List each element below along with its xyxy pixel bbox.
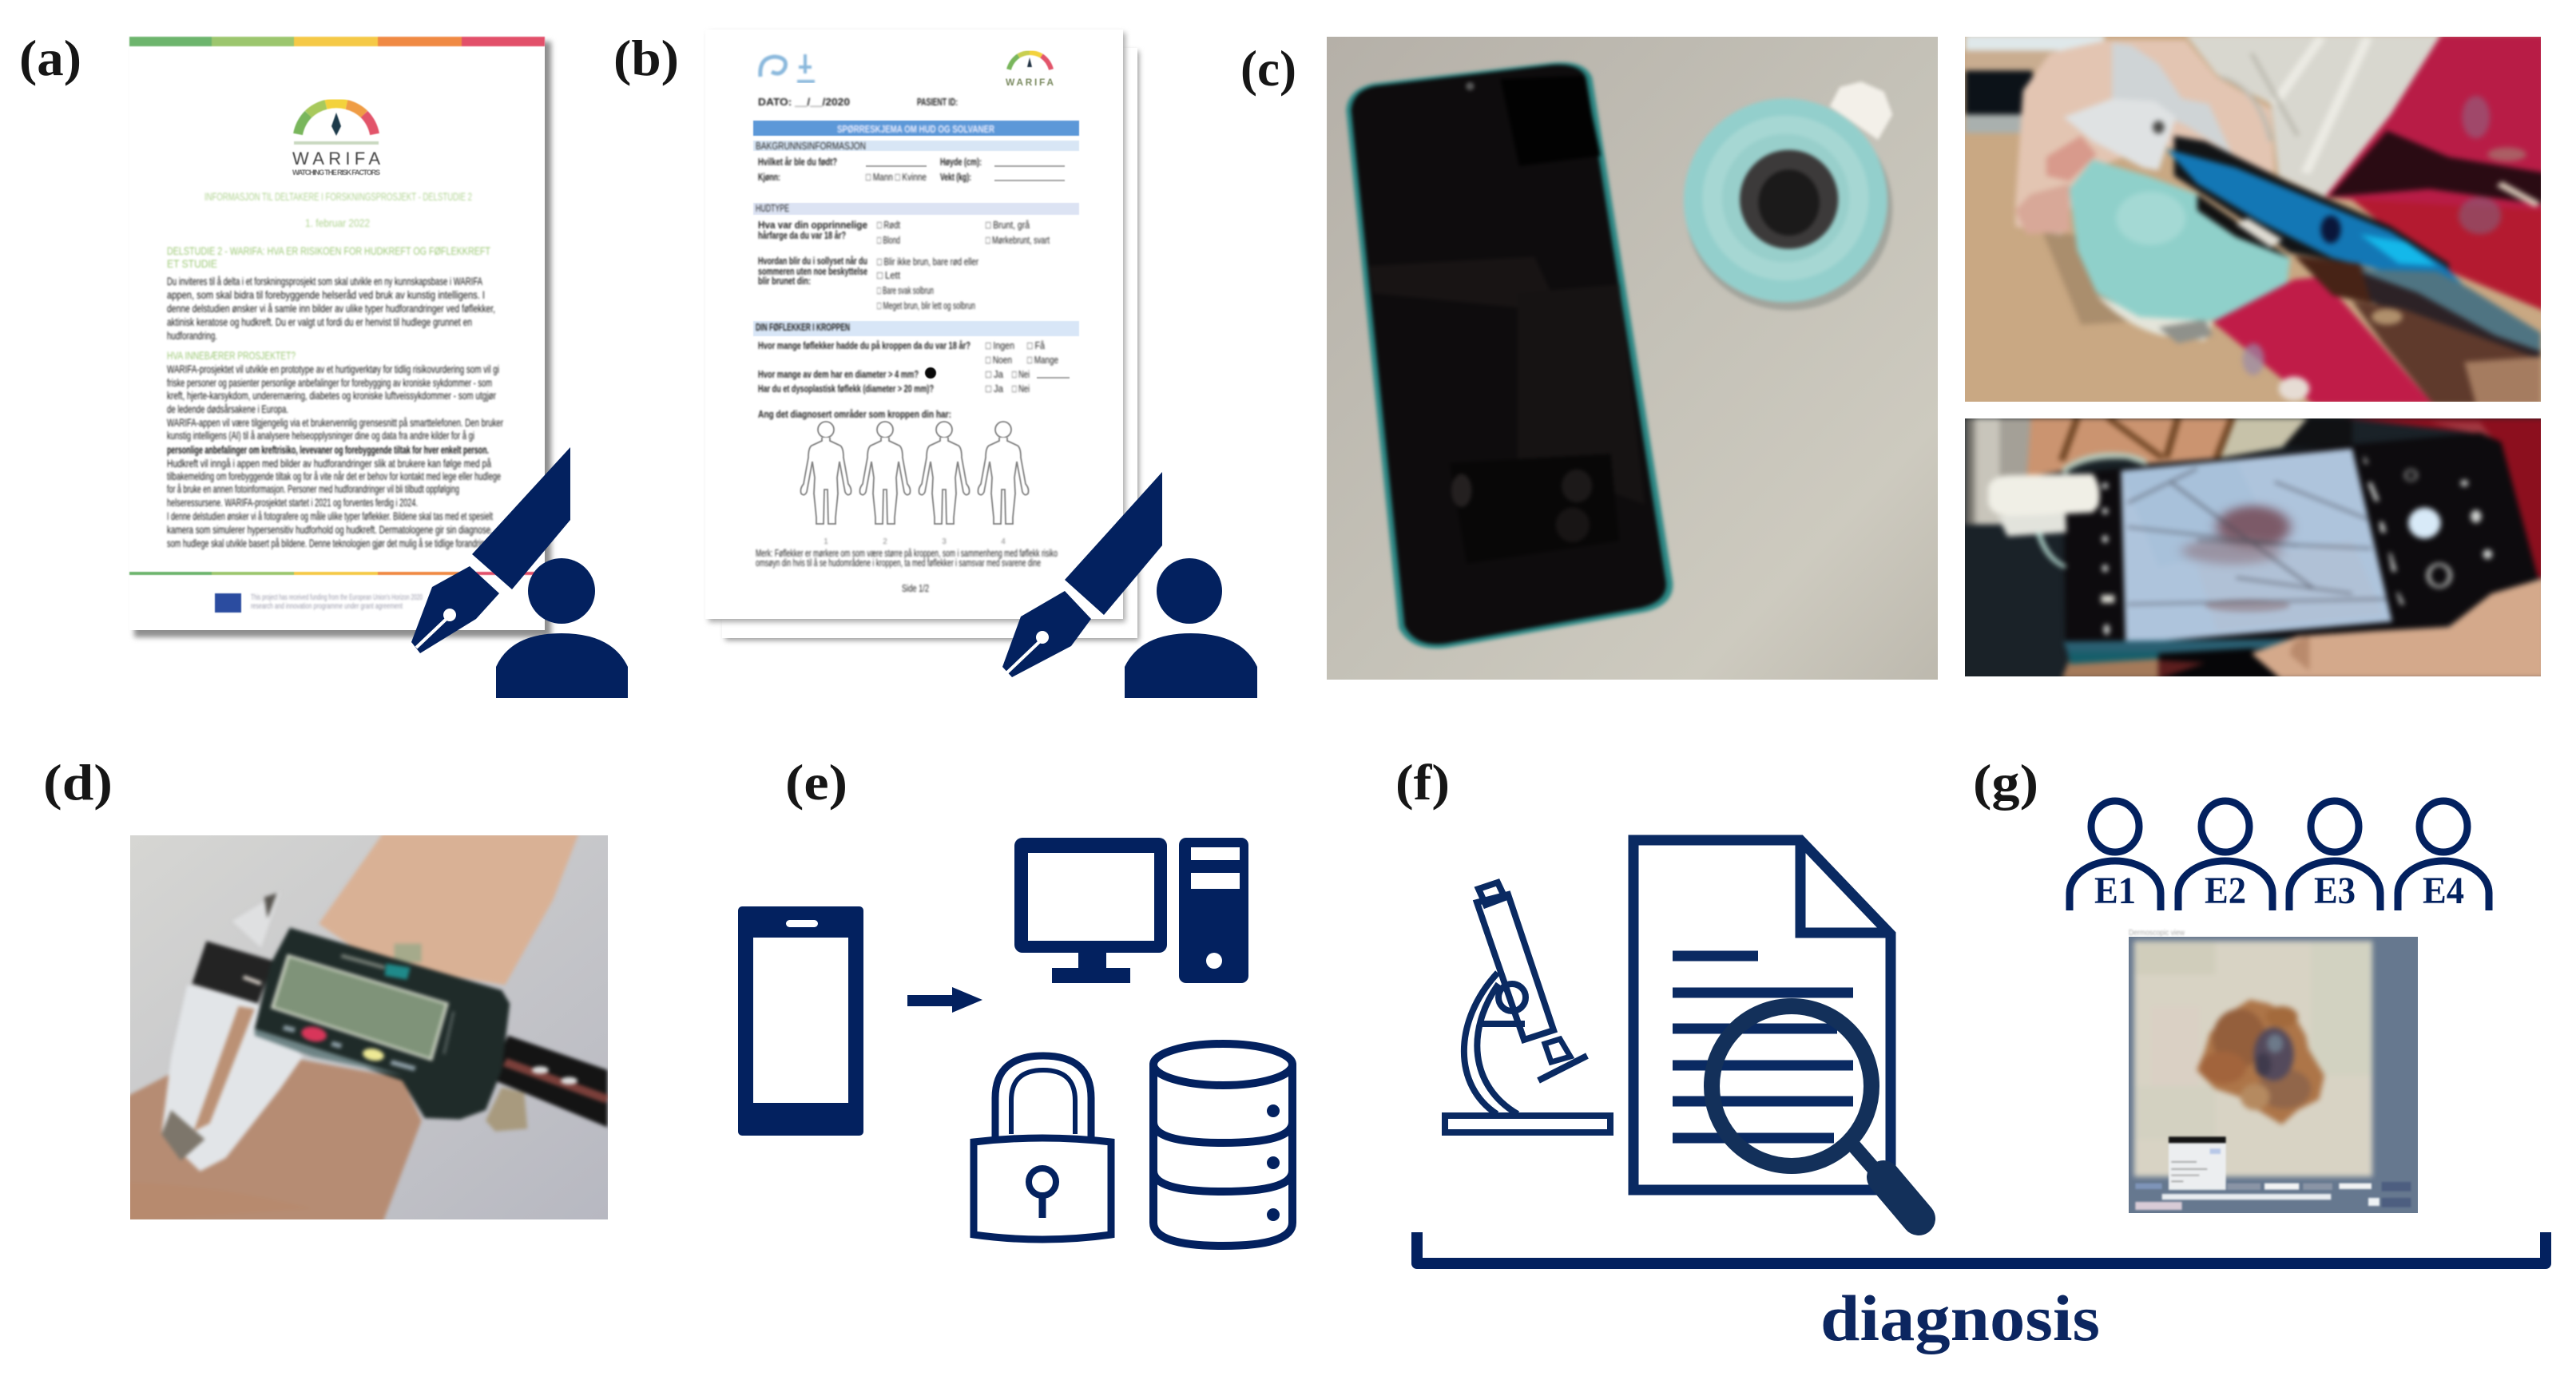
questionnaire text: BAKGRUNNSINFORMASJON [756, 140, 866, 152]
body diagrams [800, 422, 1029, 524]
questionnaire text: Merk: Føflekker er mørkere om som være større på kroppen, som i sammenheng med føflekk risiko [756, 547, 1058, 559]
questionnaire text: □ Ingen [986, 339, 1014, 351]
footer text: This project has received funding from the European Union's Horizon 2020 [251, 593, 423, 602]
questionnaire text: □ Få [1027, 339, 1046, 351]
icon: expert E3 [2289, 801, 2380, 912]
WARIFA logo: WARIFA [292, 149, 380, 169]
questionnaire text: □ Rødt [877, 219, 900, 231]
icon: expert E3: E3 [2314, 870, 2356, 912]
questionnaire text: Kjønn: [758, 171, 780, 183]
panel c: photo of phone and dermoscope lens [1327, 37, 1938, 680]
letter text: kunstig intelligens (AI) til å analysere helseopplysninger dine og data fra andre kilder for å gi [167, 429, 474, 442]
body diagram captions: 3 [942, 537, 947, 546]
label (d): (d) [43, 754, 113, 811]
letter text: de ledende dødsårsakene i Europa. [167, 402, 288, 415]
icon: microscope [1445, 882, 1610, 1132]
questionnaire text: □ Ja [986, 383, 1004, 395]
icon: expert E2: E2 [2205, 870, 2246, 912]
panel g: four expert raters and dermoscopic image [2070, 801, 2489, 1213]
panel d: photo of digital caliper on arm [126, 833, 608, 1222]
hospital logos [760, 54, 815, 81]
questionnaire text: □ Bare svak solbrun [877, 284, 934, 296]
letter text: aktinisk keratose og hudkreft. Du er valgt ut fordi du er henvist til hudlege grunnet en [167, 315, 472, 328]
body diagram captions: 4 [1001, 537, 1006, 546]
questionnaire text: Hvor mange føflekker hadde du på kroppen da du var 18 år? [758, 339, 970, 351]
icon: person [1125, 558, 1257, 698]
questionnaire text: Har du et dysoplastisk føflekk (diameter > 20 mm)? [758, 383, 934, 395]
questionnaire text: Hvordan blir du i sollyset når du [758, 255, 867, 267]
letter text: personlige anbefalinger om kreftrisiko, levevaner og forebyggende tiltak for hver enkelt person. [167, 443, 489, 456]
questionnaire text: Hvilket år ble du født? [758, 156, 837, 168]
body diagram captions: 1 [824, 537, 828, 546]
body diagram captions: 2 [883, 537, 887, 546]
letter text: HVA INNEBÆRER PROSJEKTET? [167, 349, 296, 362]
questionnaire text: □ Ja [986, 368, 1004, 380]
letter text: tilbakemelding om forebyggende tiltak og for å vite når det er behov for kontakt med lege eller hudlege [167, 470, 501, 482]
letter text: ET STUDIE [167, 257, 217, 270]
letter text: friske personer og pasienter personlige anbefalinger for forebygging av kroniske sykdommer - som [167, 376, 492, 389]
label (g): (g) [1973, 754, 2038, 811]
panel e: icons for data transfer and secure storage [738, 838, 1292, 1246]
questionnaire text: □ Mann □ Kvinne [866, 171, 927, 183]
icon: expert E1: E1 [2094, 870, 2136, 912]
icon: padlock [974, 1056, 1111, 1239]
panel c: photo of phone screen showing dermoscopic image [1965, 418, 2546, 679]
faint caption above image: Dermoscopic view [2129, 929, 2185, 938]
letter text: Du inviteres til å delta i et forskningsprosjekt som skal utvikle en ny kunnskapsbase i WARIFA [167, 275, 482, 287]
questionnaire text: Vekt (kg): [940, 171, 971, 183]
header bands [753, 121, 1079, 336]
diagnosis caption: diagnosis [1820, 1282, 2100, 1354]
questionnaire text: omsøyn din hvis til å se hudområdene i kroppen, ta med føflekker i samsvar med svarene dine [756, 557, 1041, 569]
icon: smartphone [738, 906, 863, 1136]
icon: fountain pen [411, 447, 570, 653]
small WARIFA gauge: WARIFA [1006, 77, 1054, 88]
panel a: information letter document [129, 37, 628, 698]
footer text [251, 593, 423, 611]
icon: database [1153, 1044, 1292, 1246]
letter text: 1. februar 2022 [305, 216, 370, 229]
letter text: denne delstudien ønsker vi å samle inn bilder av ulike typer hudforandringer ved føflekker, [167, 302, 495, 315]
questionnaire text: □ Nei [1012, 383, 1030, 395]
icon: fountain pen [1002, 472, 1162, 677]
letter text: I denne delstudien ønsker vi å fotografere og måle ulike typer føflekker. Bildene skal tas med et spesielt [167, 510, 493, 522]
panel f: microscope and pathology report icons [1445, 840, 1919, 1219]
back page [725, 51, 1139, 640]
questionnaire text: □ Meget brun, blir lett og solbrun [877, 299, 975, 311]
icon: expert E1 [2070, 801, 2161, 912]
bracket spanning f and g [1417, 1232, 2546, 1263]
questionnaire text: HUDTYPE [756, 202, 789, 214]
front page [705, 30, 1123, 619]
letter text: kamera som simulerer hypersensitiv hudforhold og hudkreft. Dermatologene gir sin diagnose. [167, 523, 493, 536]
questionnaire text: □ Lett [877, 269, 900, 281]
questionnaire text: □ Mange [1027, 354, 1058, 366]
letter text: kreft, hjerte-karsykdom, underernæring, diabetes og kroniske luftveissykdommer - som utgjør [167, 389, 496, 402]
questionnaire text: Ang det diagnosert områder som kroppen din har: [758, 408, 951, 420]
label (a): (a) [19, 30, 81, 86]
letter text: WARIFA-prosjektet vil utvikle en prototype av et hurtigverktøy for tidlig risikovurdering som vil gi [167, 363, 499, 375]
label (f): (f) [1395, 754, 1450, 811]
icon: person [496, 558, 628, 698]
questionnaire text: □ Brunt, grå [986, 219, 1030, 231]
EU flag [215, 593, 241, 613]
questionnaire text: Hva var din opprinnelige [758, 219, 867, 231]
questionnaire text: SPØRRESKJEMA OM HUD OG SOLVANER [837, 123, 994, 135]
questionnaire text: DIN FØFLEKKER I KROPPEN [756, 321, 850, 333]
questionnaire text: DATO: __/__/2020 [758, 96, 850, 108]
footer rule [129, 572, 545, 575]
letter text: hudforandring. [167, 329, 217, 342]
questionnaire text: □ Mørkebrunt, svart [986, 234, 1050, 246]
label (e): (e) [785, 754, 847, 811]
questionnaire text [756, 96, 1058, 594]
questionnaire text: PASIENT ID: [917, 96, 958, 108]
arrow [907, 987, 982, 1013]
icon: expert E2 [2178, 801, 2272, 912]
small WARIFA gauge [1006, 53, 1054, 88]
letter text: Hudkreft vil inngå i appen med bilder av hudforandringer slik at brukere kan følge med på [167, 457, 491, 470]
icon: expert E4 [2398, 801, 2489, 912]
icon: document [1633, 840, 1891, 1190]
label (c): (c) [1240, 40, 1296, 97]
dermoscopic image screenshot [2129, 937, 2418, 1213]
icon: magnifying glass [1712, 1006, 1919, 1219]
questionnaire text: Side 1/2 [902, 582, 929, 594]
icon: expert E4: E4 [2423, 870, 2464, 912]
letter text: DELSTUDIE 2 - WARIFA: HVA ER RISIKOEN FOR HUDKREFT OG FØFLEKKREFT [167, 244, 490, 257]
questionnaire text: hårfarge da du var 18 år? [758, 229, 846, 241]
body diagram captions [824, 537, 1006, 546]
panel c: photo of lens attached to phone on skin [1965, 34, 2546, 405]
icon: desktop computer [1014, 838, 1248, 983]
questionnaire text: □ Nei [1012, 368, 1030, 380]
letter text: WARIFA-appen vil være tilgjengelig via et brukervennlig grensesnitt på smarttelefonen. Den bruker [167, 416, 503, 429]
panel b: questionnaire document [705, 30, 1257, 698]
letter text: helseressursene. WARIFA-prosjektet startet i 2021 og forventes ferdig i 2024. [167, 496, 418, 509]
WARIFA logo: WATCHING THE RISK FACTORS [292, 169, 380, 176]
form rules [866, 166, 1070, 378]
marker dot [925, 367, 936, 379]
label (b): (b) [613, 30, 679, 86]
letter text: som hudlege skal utvikle basert på bildene. Denne teknologien gjør det mulig å se tidlige forandringer. [167, 537, 497, 549]
questionnaire text: □ Blir ikke brun, bare rød eller [877, 256, 978, 268]
questionnaire text: blir brunet din: [758, 275, 811, 287]
WARIFA logo [292, 103, 380, 176]
questionnaire text: □ Noen [986, 354, 1012, 366]
questionnaire text: Høyde (cm): [940, 156, 982, 168]
footer text: research and innovation programme under grant agreement [251, 602, 403, 611]
letter text: INFORMASJON TIL DELTAKERE I FORSKNINGSPROSJEKT - DELSTUDIE 2 [204, 190, 472, 203]
questionnaire text: sommeren uten noe beskyttelse [758, 265, 867, 277]
questionnaire text: □ Blond [877, 234, 900, 246]
letter text [167, 190, 503, 549]
questionnaire text: Hvor mange av dem har en diameter > 4 mm? [758, 368, 919, 380]
letter text: appen, som skal bidra til forebyggende helseråd ved bruk av kunstig intelligens. I [167, 288, 485, 301]
top colour bar [129, 37, 545, 46]
letter text: for å bruke en annen fotoinformasjon. Personer med hudforandringer vil bli tilbudt oppfølging [167, 482, 459, 495]
